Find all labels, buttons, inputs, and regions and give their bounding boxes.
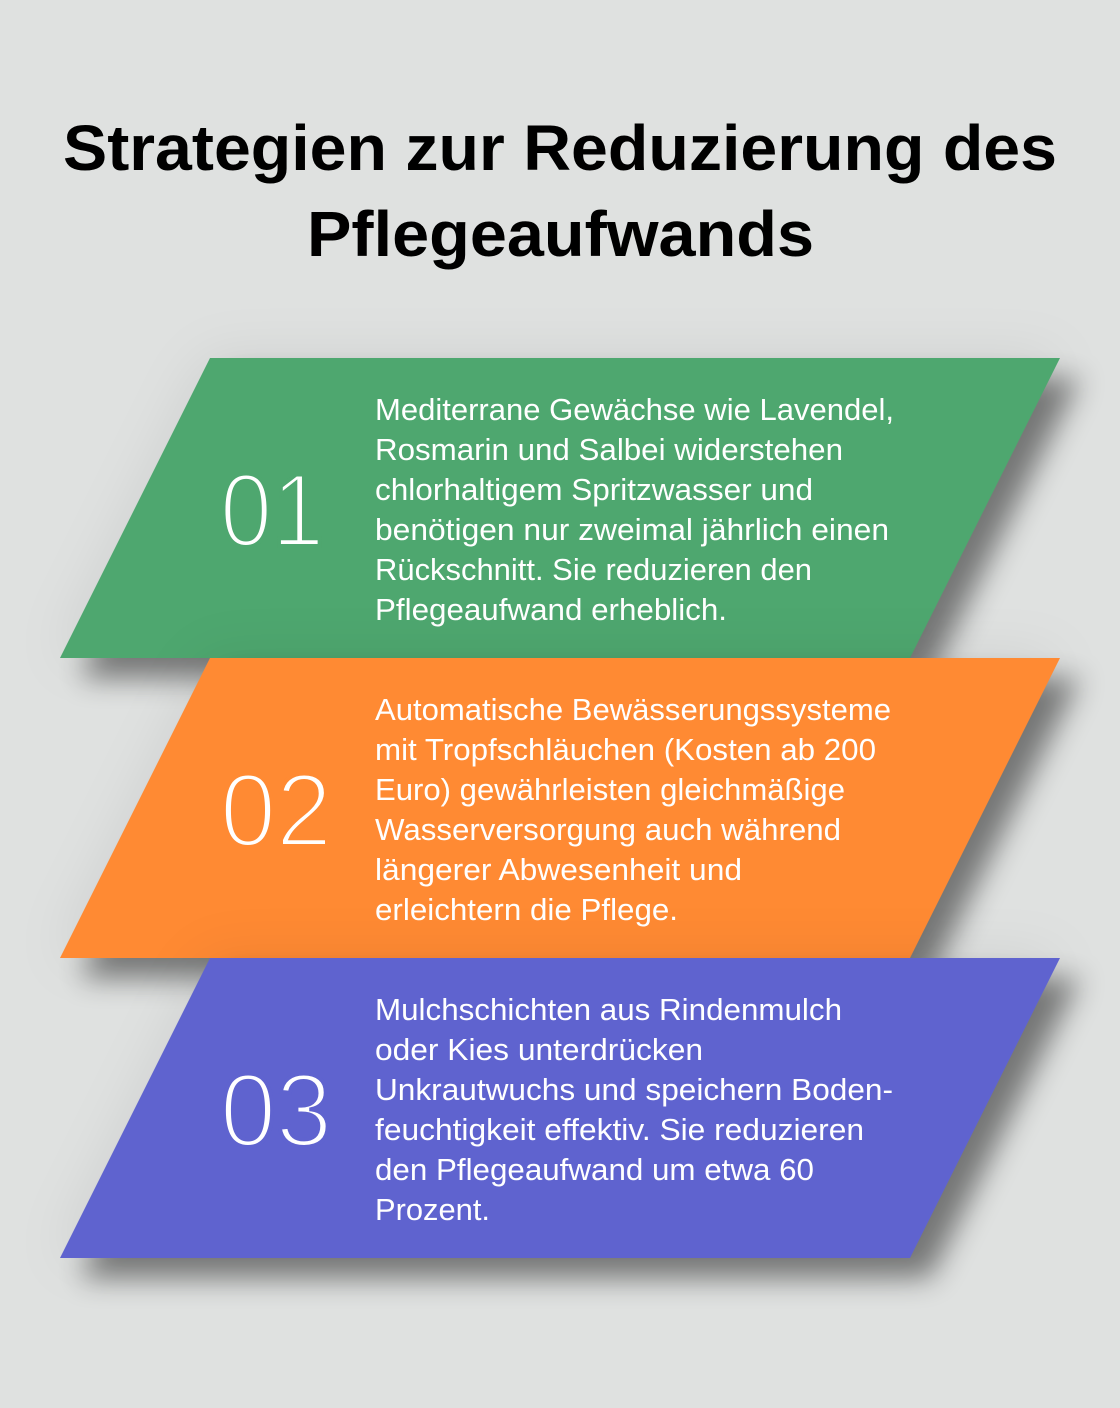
text block: step 01: Rückschnitt. Sie reduzieren den — [375, 553, 812, 587]
text block: step 02: Euro) gewährleisten gleichmäßige — [375, 773, 845, 807]
text block: step 03: Prozent. — [375, 1193, 490, 1227]
text block: step 01: chlorhaltigem Spritzwasser und — [375, 473, 813, 507]
panel: step 01 — [60, 358, 1060, 658]
text block: step 03: Mulchschichten aus Rindenmulch — [375, 993, 842, 1027]
text block: step 01: benötigen nur zweimal jährlich einen — [375, 513, 889, 547]
text block: step 03: oder Kies unterdrücken — [375, 1033, 703, 1067]
title: Pflegeaufwands — [307, 198, 814, 270]
text block: step 03: Unkrautwuchs und speichern Boden- — [375, 1073, 893, 1107]
title: Strategien zur Reduzierung des — [63, 112, 1057, 184]
text block: step 02: längerer Abwesenheit und — [375, 853, 742, 887]
text block: step 02: Wasserversorgung auch während — [375, 813, 841, 847]
parallelogram: purple — [60, 958, 1060, 1258]
text block: step 02: mit Tropfschläuchen (Kosten ab 200 — [375, 733, 876, 767]
text block: step 03: den Pflegeaufwand um etwa 60 — [375, 1153, 814, 1187]
title — [63, 112, 1057, 270]
number 03: 03 — [220, 1053, 332, 1169]
panel: step 03 — [60, 958, 1060, 1258]
text block: step 02 — [375, 693, 891, 927]
text block: step 01: Rosmarin und Salbei widerstehen — [375, 433, 843, 467]
text block: step 02: Automatische Bewässerungssysteme — [375, 693, 891, 727]
text block: step 02: erleichtern die Pflege. — [375, 893, 678, 927]
text block: step 03 — [375, 993, 893, 1227]
text block: step 01 — [375, 393, 894, 627]
parallelogram: green — [60, 358, 1060, 658]
text block: step 01: Mediterrane Gewächse wie Lavendel, — [375, 393, 894, 427]
text block: step 01: Pflegeaufwand erheblich. — [375, 593, 727, 627]
parallelogram: orange — [60, 658, 1060, 958]
text block: step 03: feuchtigkeit effektiv. Sie reduzieren — [375, 1113, 864, 1147]
number 01: 01 — [220, 453, 324, 569]
number 02: 02 — [220, 753, 332, 869]
panel: step 02 — [60, 658, 1060, 958]
